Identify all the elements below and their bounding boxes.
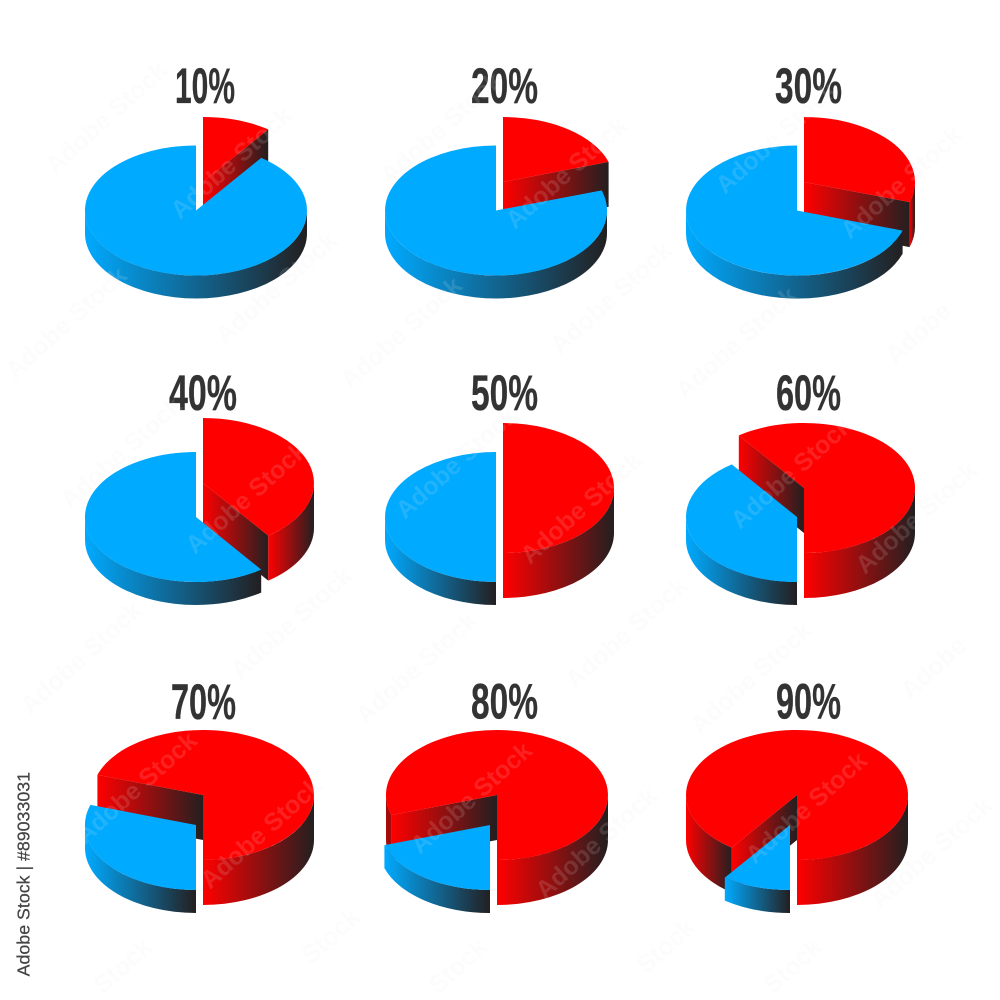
red slice: 70% [97, 730, 314, 905]
pie chart: 80% [384, 674, 608, 913]
blue slice: 60% [85, 452, 261, 605]
watermark: repeated Adobe Stock text: Stock [88, 933, 158, 999]
pie chart: 60% [686, 365, 915, 605]
blue slice: 80% [385, 146, 607, 298]
watermark: repeated Adobe Stock text: Adobe Stock [165, 101, 298, 224]
watermark: repeated Adobe Stock text: Adobe Stock [405, 736, 538, 859]
watermark: repeated Adobe Stock text: Adobe Stock [390, 401, 523, 524]
blue slice: 10% [725, 825, 790, 913]
watermark: repeated Adobe Stock text: Adobe Stock [670, 281, 803, 404]
red slice: 40% [203, 418, 314, 581]
pie chart: 50% [385, 365, 614, 605]
watermark: repeated Adobe Stock text: Adobe Stock [195, 771, 328, 894]
label: 10%: 10% [175, 58, 235, 114]
watermark: repeated Adobe Stock text: Adobe Stock [180, 436, 313, 559]
watermark: repeated Adobe Stock text: Adobe Stock [710, 76, 843, 199]
watermark: repeated Adobe Stock text: Adobe Stock [545, 236, 678, 359]
pie chart: 30% [686, 58, 915, 299]
blue slice: 40% [686, 464, 797, 605]
watermark: repeated Adobe Stock text: Stock [423, 933, 493, 999]
blue slice: 90% [85, 146, 307, 298]
red slice: 20% [503, 117, 609, 227]
watermark: repeated Adobe Stock text: Stock [758, 933, 828, 999]
watermark: repeated Adobe Stock text: Stock [631, 913, 701, 979]
red slice: 50% [503, 423, 614, 598]
watermark: repeated Adobe Stock text: Adobe [880, 297, 957, 369]
label: 20%: 20% [471, 58, 538, 114]
label: 90%: 90% [776, 674, 841, 730]
pie chart: 40% [85, 365, 314, 605]
pie chart: 70% [85, 674, 314, 913]
watermark: repeated Adobe Stock text: Adobe Stock [55, 391, 188, 514]
blue slice: 20% [384, 825, 490, 913]
red slice: 60% [739, 423, 915, 598]
red slice: 10% [203, 117, 268, 227]
watermark: repeated Adobe Stock text: Adobe Stock [225, 561, 358, 684]
watermark: repeated Adobe Stock text: Adobe Stock [560, 571, 693, 694]
watermark: repeated Adobe Stock text: Adobe Stock [865, 791, 998, 914]
label: 60%: 60% [776, 365, 841, 421]
watermark: repeated Adobe Stock text: Adobe Stock [835, 121, 968, 244]
label: 30%: 30% [775, 58, 842, 114]
watermark: repeated Adobe Stock text: Adobe Stock [40, 56, 173, 179]
watermark: repeated Adobe Stock text: Adobe Stock [70, 726, 203, 849]
watermark: repeated Adobe Stock text: Adobe Stock [15, 596, 148, 719]
watermark: repeated Adobe Stock text: Adobe Stock [0, 261, 133, 384]
pie chart: 20% [385, 58, 609, 298]
red slice: 80% [386, 730, 608, 905]
blue slice: 30% [85, 805, 196, 913]
label: 50%: 50% [471, 365, 538, 421]
blue slice: 50% [385, 452, 496, 605]
watermark: repeated Adobe Stock text: Adobe Stock [740, 746, 873, 869]
watermark: repeated Adobe Stock text: Adobe Stock [500, 111, 633, 234]
watermark: repeated Adobe Stock text: Adobe Stock [530, 781, 663, 904]
label: 40%: 40% [169, 365, 237, 421]
label: 70%: 70% [171, 674, 236, 730]
watermark: repeated Adobe Stock text: Adobe Stock [725, 411, 858, 534]
watermark: repeated Adobe Stock text: Adobe Stock [850, 456, 983, 579]
watermark: repeated Adobe Stock text: Adobe Stock [515, 446, 648, 569]
watermark: repeated Adobe Stock text: Adobe [895, 632, 972, 704]
red slice: 30% [804, 117, 915, 247]
watermark: repeated Adobe Stock text: Adobe Stock [335, 271, 468, 394]
watermark: repeated Adobe Stock text: Adobe Stock [375, 66, 508, 189]
watermark: repeated Adobe Stock text: Adobe Stock [350, 606, 483, 729]
watermark: repeated Adobe Stock text: Adobe Stock [685, 616, 818, 739]
watermark: repeated Adobe Stock text: Stock [296, 903, 366, 969]
pie chart: 10% [85, 58, 307, 298]
stock id: vertical text: Adobe Stock | #89033031 [14, 772, 34, 976]
label: 80%: 80% [471, 674, 538, 730]
red slice: 90% [686, 730, 908, 905]
watermark: repeated Adobe Stock text: Adobe Stock [210, 226, 343, 349]
blue slice: 70% [686, 146, 903, 299]
pie chart: 90% [686, 674, 908, 913]
